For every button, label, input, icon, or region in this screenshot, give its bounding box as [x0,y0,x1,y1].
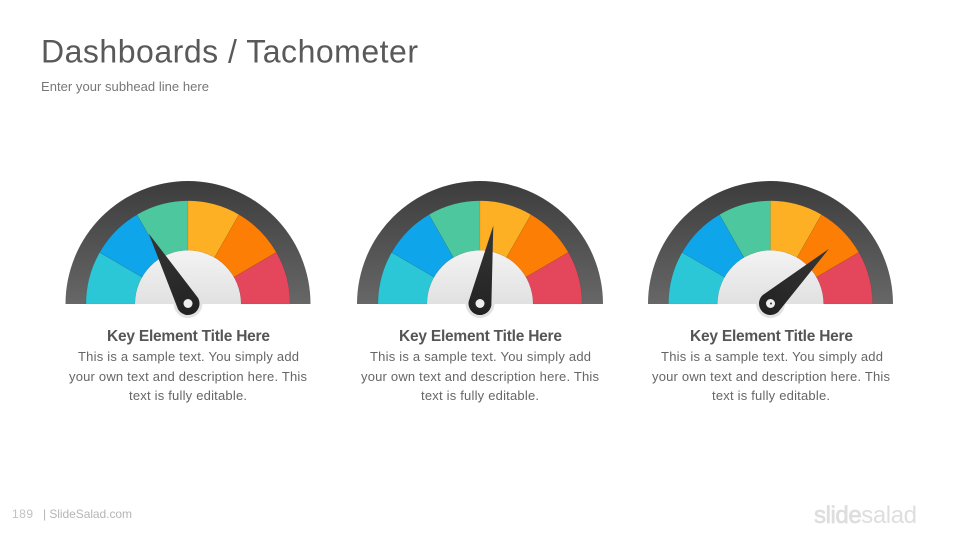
logo: slidesalad [814,502,917,529]
gauge 3 heading: Key Element Title Here [690,328,853,345]
gauge 3 [648,181,893,320]
segment: orange [506,215,568,277]
dial face [378,201,582,304]
footer source: | SlideSalad.com [43,507,132,521]
gauge 2 heading: Key Element Title Here [399,328,562,345]
needle [139,228,204,319]
segment: cyan [668,252,725,304]
outer ring [357,181,603,304]
segment: red [816,252,872,304]
segment: red [234,252,290,304]
segment: cyan [378,252,434,304]
subhead: Enter your subhead line here [41,79,209,94]
needle [754,240,837,320]
segment: yellow [188,201,239,258]
segment: green [720,201,770,258]
gauge 3 text: your own text and description here. This [652,369,890,384]
gauge 3 text: This is a sample text. You simply add [661,349,883,364]
segment: orange [214,215,276,277]
hub [718,250,824,304]
gauge 1 [66,181,310,319]
segment: yellow [480,201,531,258]
gauge 3 text: text is fully editable. [712,388,830,403]
segment: yellow [770,201,822,258]
segment: blue [100,215,162,277]
segment: cyan [86,252,142,304]
gauge 1 heading: Key Element Title Here [107,328,270,345]
gauge 2 text: This is a sample text. You simply add [370,349,591,364]
needle [467,224,505,317]
segment: green [137,201,188,258]
needle halo [756,289,785,318]
hub [135,250,241,304]
gauge 1 text: text is fully editable. [129,388,247,403]
gauge 2 [357,181,603,318]
gauge 2 text: text is fully editable. [421,388,539,403]
needle halo [466,289,494,318]
dial face [86,201,290,304]
needle pin [476,299,484,308]
needle pin [184,299,192,308]
needle pin [766,299,775,308]
hub [427,250,533,304]
gauge 3 text [652,349,890,403]
segment: orange [797,215,859,277]
segment: green [429,201,480,258]
segment: blue [392,215,454,277]
needle halo [174,289,202,318]
gauge 1 text: your own text and description here. This [69,369,308,384]
gauge 1 text [69,349,308,403]
dial face [668,201,872,304]
outer ring [648,181,893,304]
page number: 189 [12,507,33,521]
gauge 2 text: your own text and description here. This [361,369,600,384]
outer ring [66,181,310,304]
gauge 2 text [361,349,600,403]
gauge 1 text: This is a sample text. You simply add [78,349,299,364]
segment: red [526,252,582,304]
segment: blue [682,215,744,277]
title: Dashboards / Tachometer [41,34,418,70]
